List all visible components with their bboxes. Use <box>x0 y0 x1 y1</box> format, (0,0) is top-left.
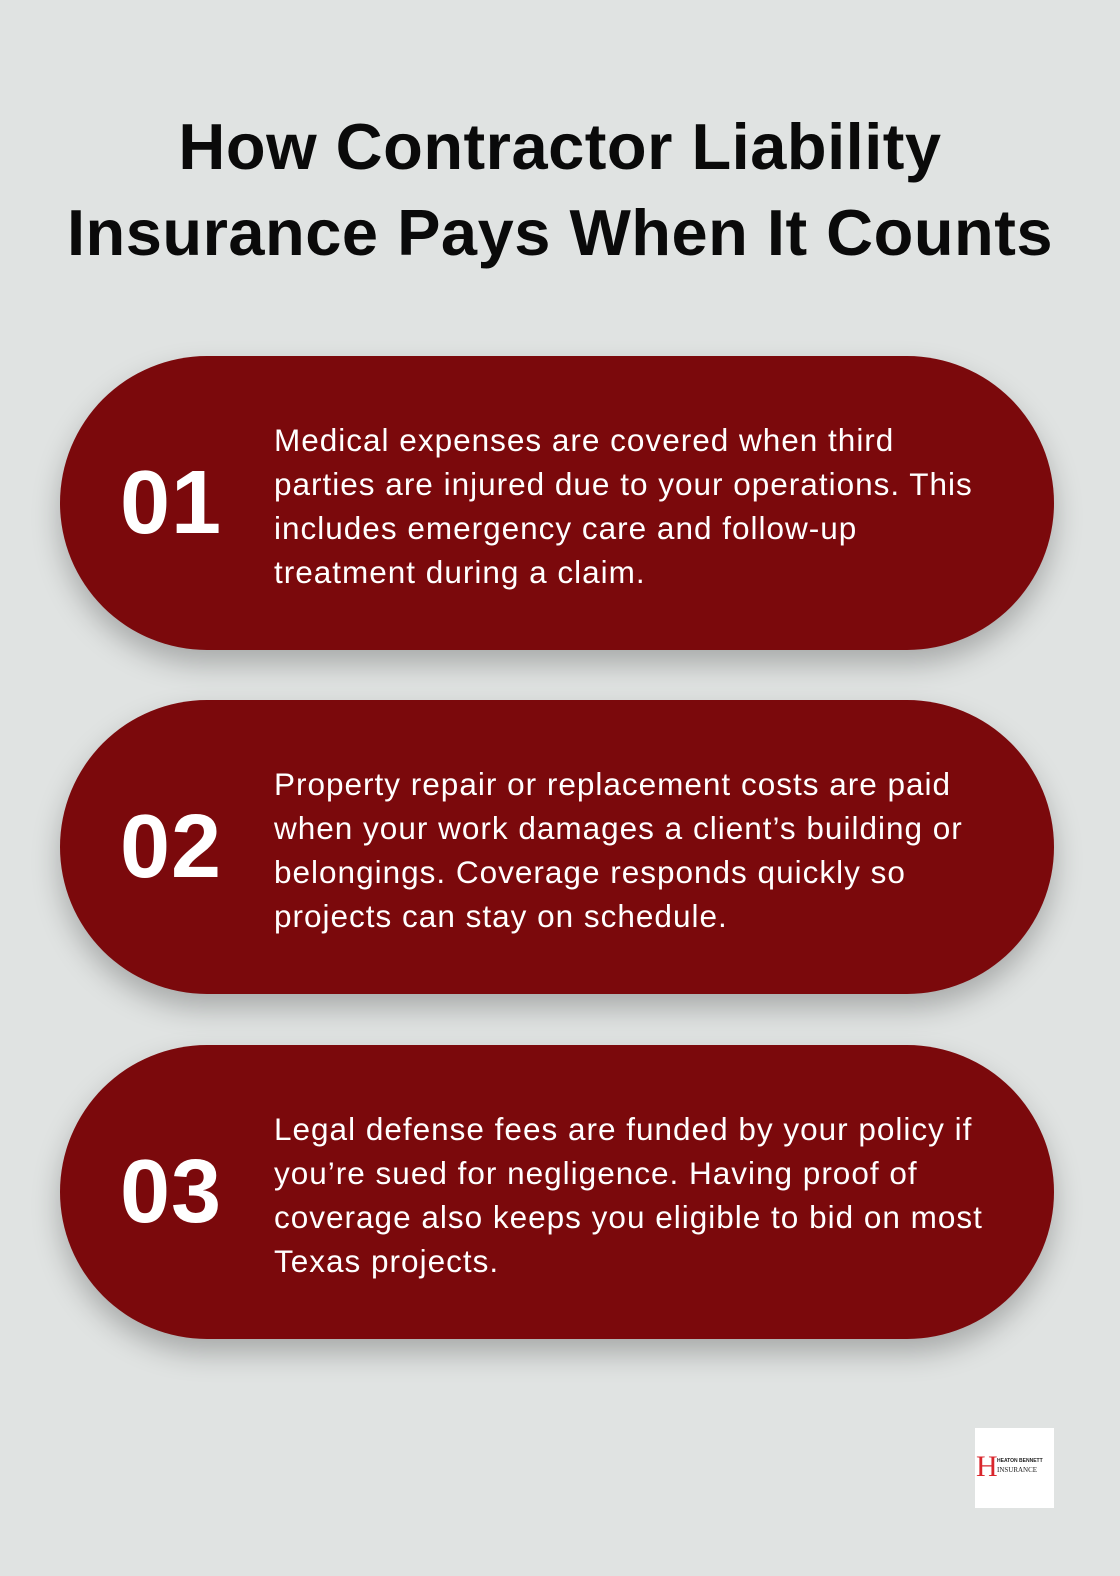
number 02: 02 <box>120 797 222 897</box>
text 01 <box>274 422 973 590</box>
number 03: 03 <box>120 1142 222 1242</box>
logo: H <box>976 1450 998 1483</box>
text 03: coverage also keeps you eligible to bid on most <box>274 1199 983 1235</box>
number 01: 01 <box>120 453 222 553</box>
title: Insurance Pays When It Counts <box>67 196 1053 269</box>
text 02: belongings. Coverage responds quickly so <box>274 854 906 890</box>
text 02 <box>274 766 963 934</box>
title <box>67 110 1053 269</box>
text 03 <box>274 1111 983 1279</box>
text 01: treatment during a claim. <box>274 554 646 590</box>
logo: HEATON BENNETT <box>997 1458 1043 1464</box>
logo: INSURANCE <box>997 1466 1037 1474</box>
text 01: Medical expenses are covered when third <box>274 422 894 458</box>
text 02: Property repair or replacement costs are paid <box>274 766 951 802</box>
text 03: Legal defense fees are funded by your policy if <box>274 1111 972 1147</box>
panel: card 01 <box>60 356 1054 650</box>
text 01: includes emergency care and follow-up <box>274 510 857 546</box>
text 03: you’re sued for negligence. Having proof of <box>274 1155 918 1191</box>
logo <box>975 1428 1054 1508</box>
text 02: when your work damages a client’s building or <box>274 810 963 846</box>
text 01: parties are injured due to your operations. This <box>274 466 973 502</box>
text 03: Texas projects. <box>274 1243 499 1279</box>
text 02: projects can stay on schedule. <box>274 898 728 934</box>
title: How Contractor Liability <box>178 110 942 183</box>
panel: card 03 <box>60 1045 1054 1339</box>
panel: card 02 <box>60 700 1054 994</box>
